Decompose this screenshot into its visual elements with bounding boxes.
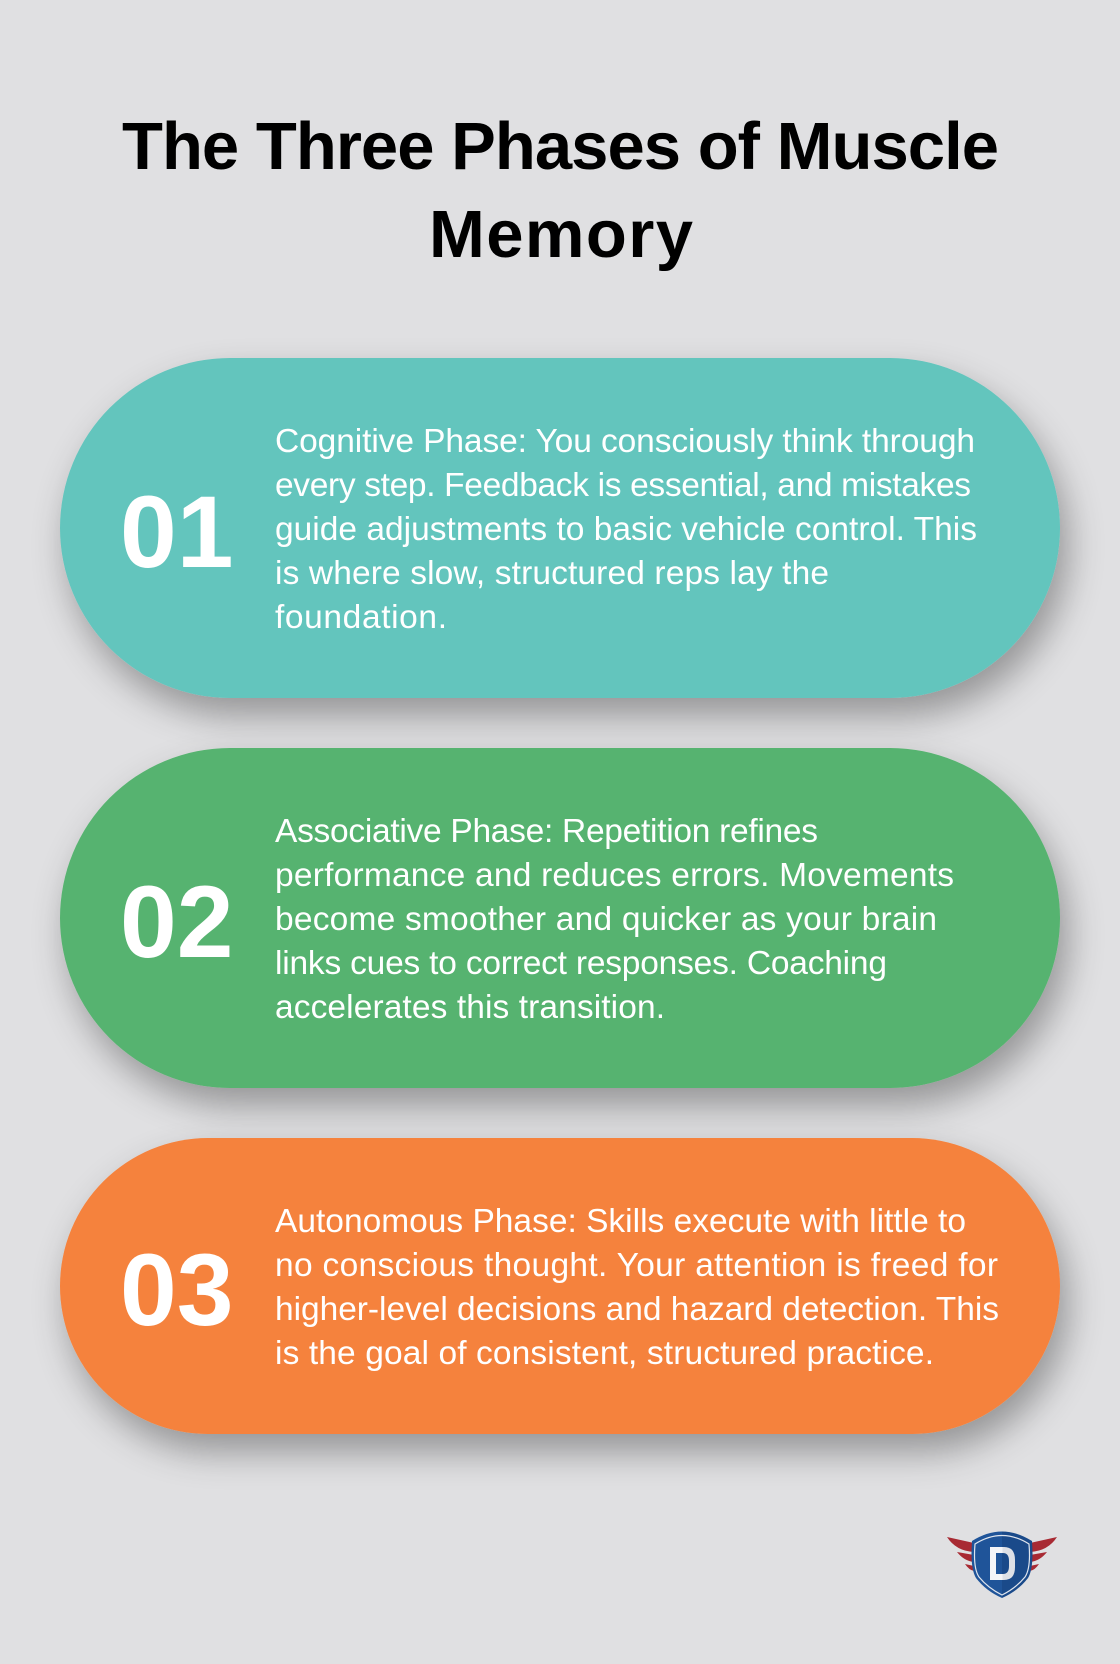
text block: associative phase: become smoother and quicker as your brain (275, 901, 937, 938)
text block: cognitive phase: guide adjustments to basic vehicle control. This (275, 511, 977, 548)
text block: autonomous phase: no conscious thought. Your attention is freed for (275, 1247, 998, 1284)
text block: autonomous phase (275, 1203, 999, 1372)
title (122, 109, 999, 272)
panel: associative phase (60, 748, 1060, 1088)
title: Memory (429, 197, 693, 272)
text block: associative phase: performance and reduces errors. Movements (275, 857, 954, 894)
pill background orange (60, 1138, 1060, 1434)
text block: associative phase: Associative Phase: Repetition refines (275, 813, 818, 850)
text block: cognitive phase: foundation. (275, 599, 447, 636)
text block: cognitive phase: is where slow, structured reps lay the (275, 555, 829, 592)
text block: autonomous phase: higher-level decisions and hazard detection. This (275, 1291, 999, 1328)
text block: associative phase (275, 813, 954, 1026)
panel: autonomous phase (60, 1138, 1060, 1434)
panel: cognitive phase (60, 358, 1060, 698)
text block: associative phase: links cues to correct responses. Coaching (275, 945, 887, 982)
text block: cognitive phase (275, 423, 977, 636)
text block: associative phase: accelerates this transition. (275, 989, 665, 1026)
number 03: 03 (120, 1233, 233, 1347)
pill background green (60, 748, 1060, 1088)
text block: autonomous phase: Autonomous Phase: Skills execute with little to (275, 1203, 966, 1240)
number 02: 02 (120, 865, 233, 979)
pill background teal (60, 358, 1060, 698)
icon: shield logo with wings (947, 1532, 1057, 1598)
title: The Three Phases of Muscle (122, 109, 999, 184)
text block: cognitive phase: Cognitive Phase: You consciously think through (275, 423, 975, 460)
number 01: 01 (120, 475, 233, 589)
text block: autonomous phase: is the goal of consistent, structured practice. (275, 1335, 934, 1372)
text block: cognitive phase: every step. Feedback is essential, and mistakes (275, 467, 971, 504)
